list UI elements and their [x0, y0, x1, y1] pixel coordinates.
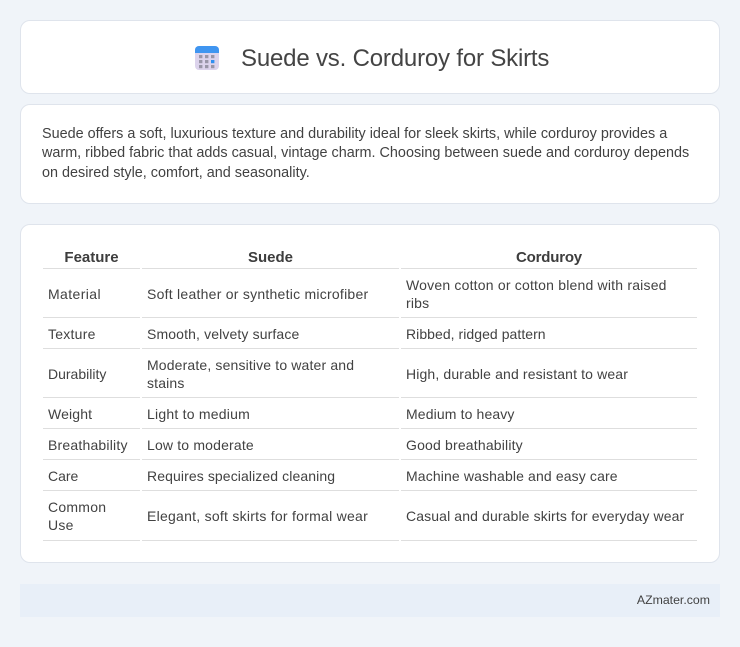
title: Suede vs. Corduroy for Skirts — [241, 45, 549, 72]
row: durability: High, durable and resistant to wear — [406, 366, 628, 382]
row: breathability — [48, 437, 523, 453]
row: texture: Ribbed, ridged pattern — [406, 326, 546, 342]
panel: title card — [20, 20, 720, 94]
row: texture: Smooth, velvety surface — [147, 326, 299, 342]
footer source text: AZmater.com — [637, 593, 710, 607]
row: care: Requires specialized cleaning — [147, 468, 335, 484]
row: breathability: Low to moderate — [147, 437, 254, 453]
row: common use: Use — [48, 517, 74, 533]
row: weight: Medium to heavy — [406, 406, 515, 422]
text block: intro: Suede offers a soft, luxurious texture and durability ideal for sleek skirts, while corduroy provides a — [42, 126, 667, 142]
row: weight: Weight — [48, 406, 92, 422]
row: material: ribs — [406, 295, 429, 311]
footer bar — [20, 584, 720, 617]
row: material — [48, 277, 667, 311]
row: durability: Moderate, sensitive to water and — [147, 357, 354, 373]
row: texture: Texture — [48, 326, 96, 342]
panel: comparison table — [20, 224, 720, 563]
row: texture — [48, 326, 546, 342]
row: material: Material — [48, 286, 101, 302]
row: care — [48, 468, 618, 484]
panel: introduction — [20, 104, 720, 204]
row: durability — [48, 357, 628, 391]
row: common use: Casual and durable skirts for everyday wear — [406, 508, 684, 524]
text block: intro — [42, 126, 689, 181]
row: care: Care — [48, 468, 78, 484]
row: common use — [48, 499, 684, 533]
text block: intro: on desired style, comfort, and seasonality. — [42, 165, 310, 181]
row: breathability: Breathability — [48, 437, 128, 453]
row: weight: Light to medium — [147, 406, 250, 422]
table header: Suede — [248, 249, 293, 266]
row: common use: Common — [48, 499, 106, 515]
row: material: Woven cotton or cotton blend with raised — [406, 277, 667, 293]
row: durability: Durability — [48, 366, 106, 382]
table header: Corduroy — [516, 249, 582, 266]
row: durability: stains — [147, 375, 184, 391]
row: breathability: Good breathability — [406, 437, 523, 453]
row: care: Machine washable and easy care — [406, 468, 618, 484]
row: common use: Elegant, soft skirts for formal wear — [147, 508, 368, 524]
table header — [64, 249, 582, 266]
text block: intro: warm, ribbed fabric that adds casual, vintage charm. Choosing between suede and corduroy depends — [42, 145, 689, 161]
row: material: Soft leather or synthetic microfiber — [147, 286, 368, 302]
table header: Feature — [64, 249, 119, 266]
icon: calendar — [195, 46, 219, 70]
row: weight — [48, 406, 515, 422]
